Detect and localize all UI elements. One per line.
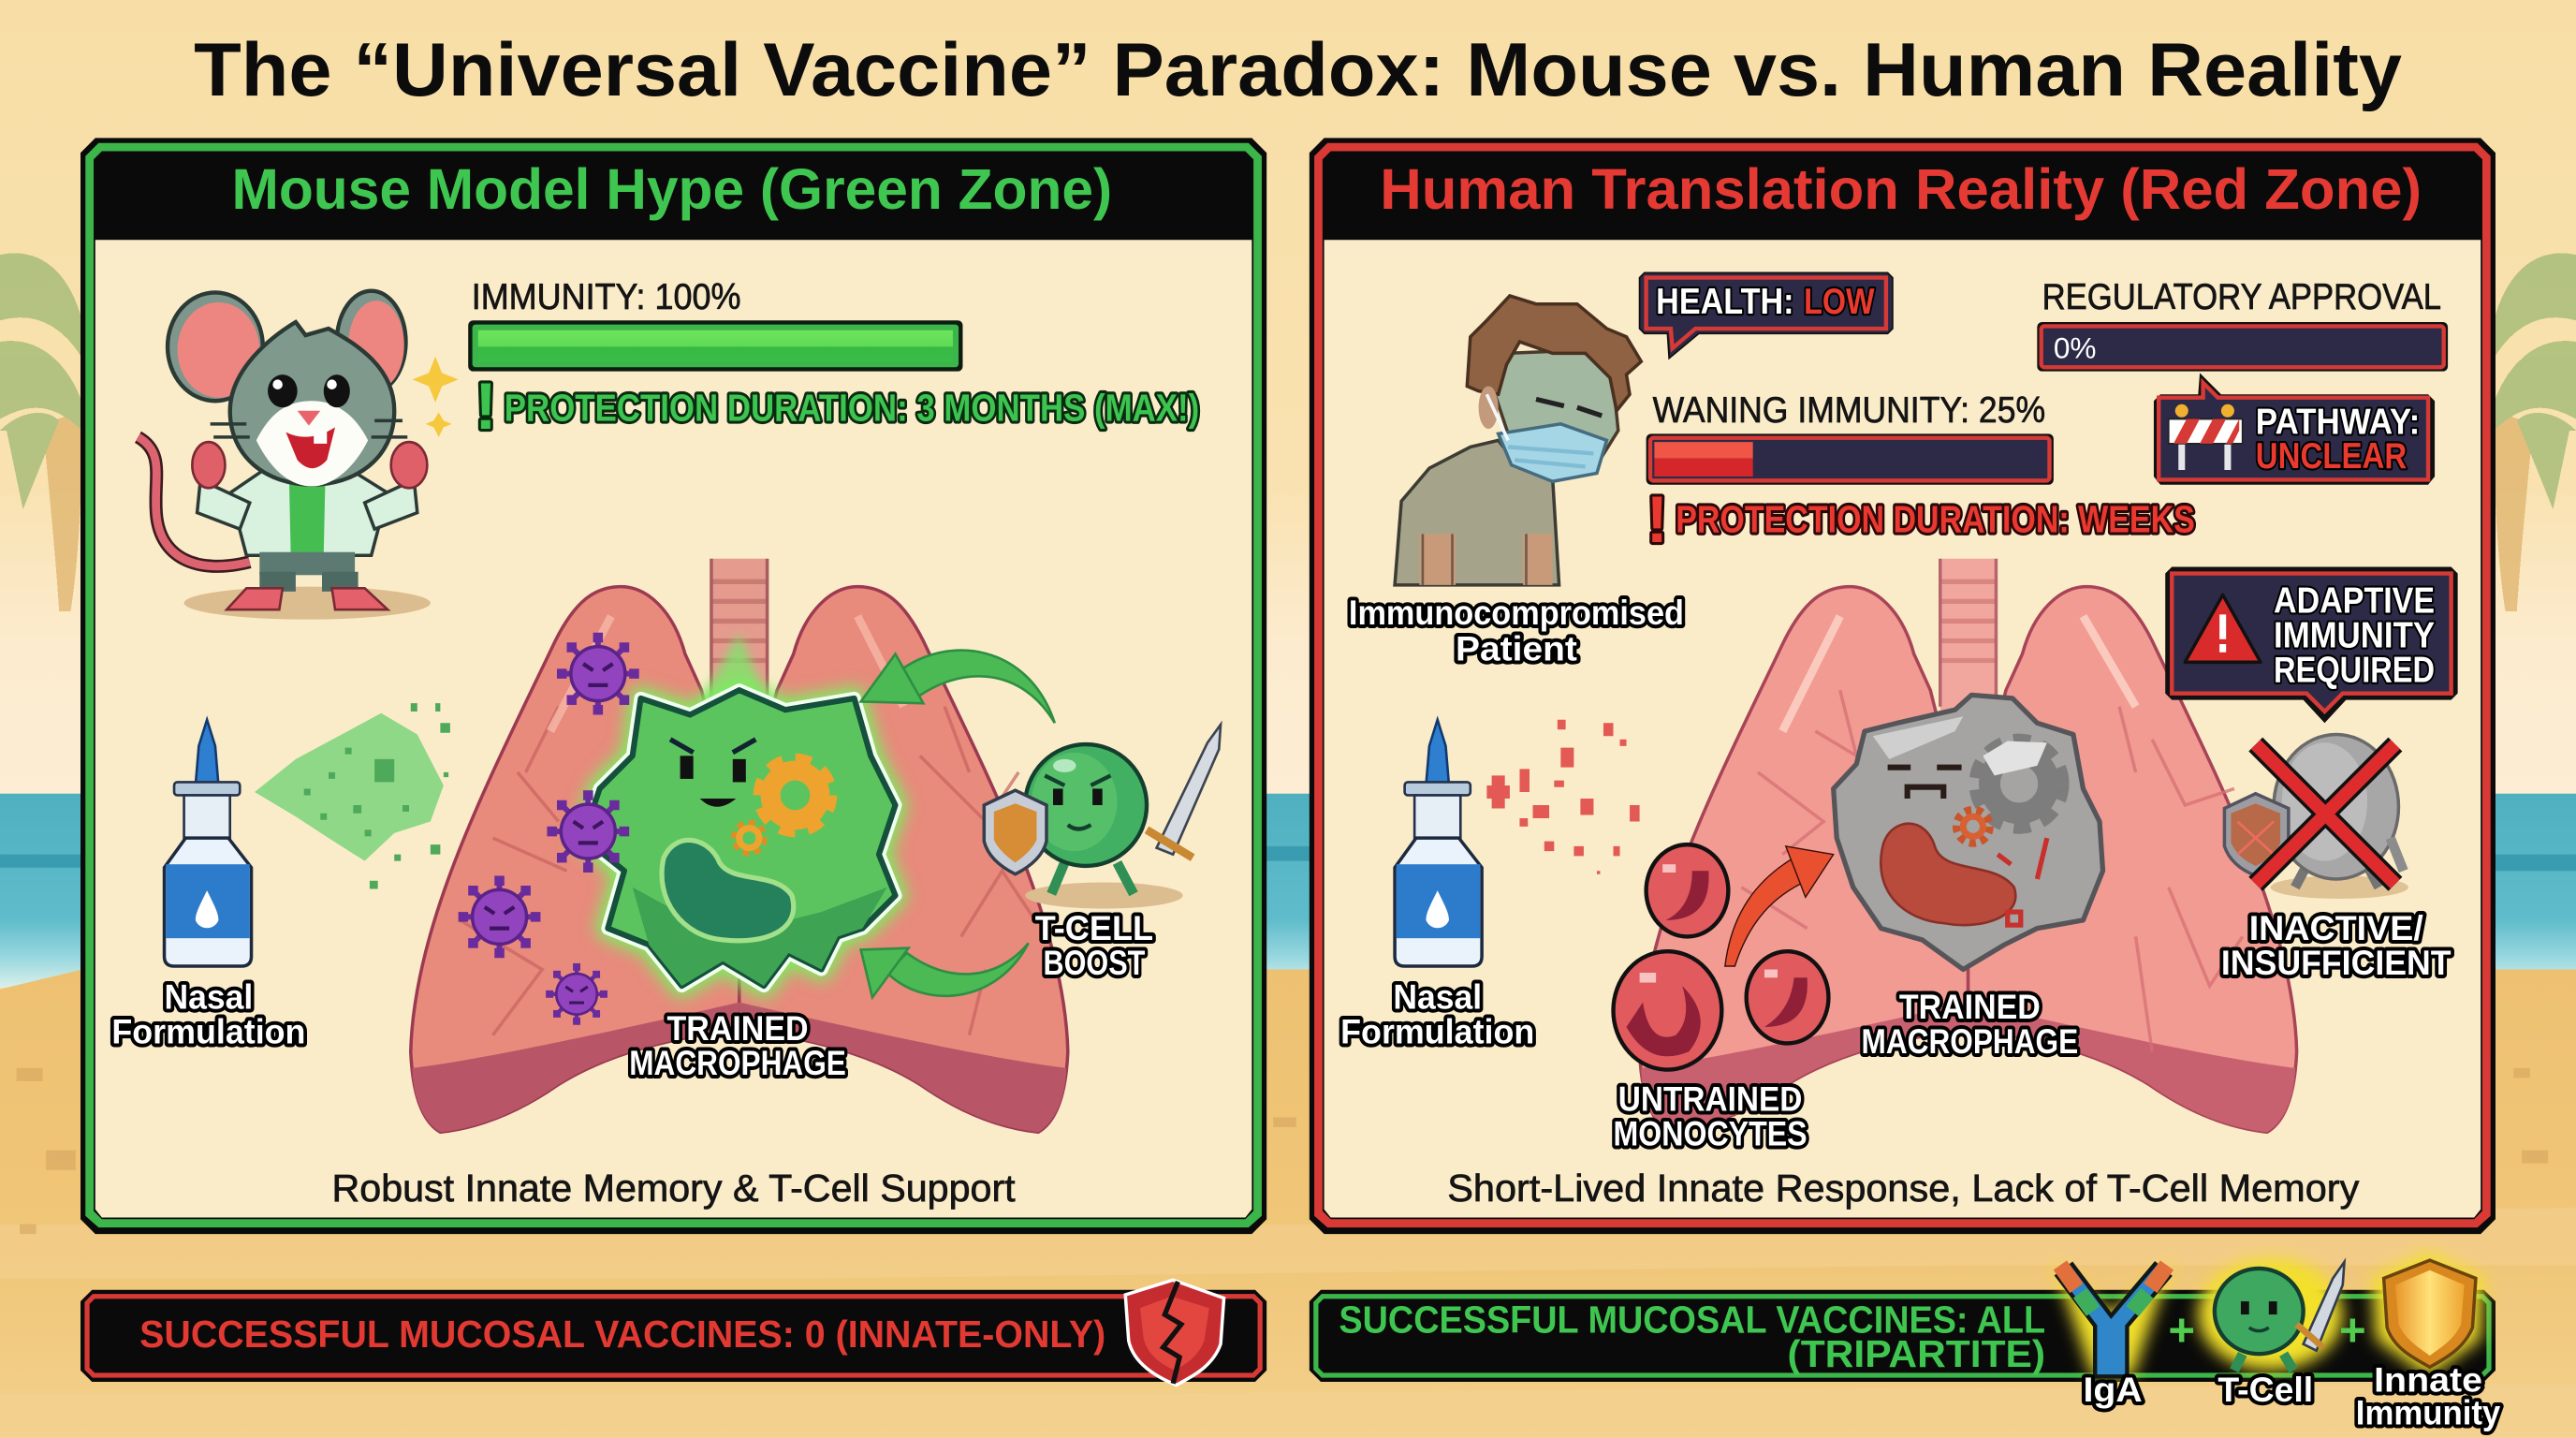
label: T-cell boost: T-CELL bbox=[1035, 909, 1153, 947]
bottom banner: innate-only failure: SUCCESSFUL MUCOSAL VACCINES: 0 (INNATE-ONLY) bbox=[139, 1313, 1105, 1356]
arrow: lower T-cell boost arrow bbox=[861, 943, 1029, 997]
label: inactive / insufficient: INSUFFICIENT bbox=[2221, 944, 2452, 982]
lungs bbox=[411, 587, 1068, 1132]
viruses bbox=[459, 633, 639, 1025]
nucleus bbox=[1881, 824, 2015, 925]
trachea bbox=[711, 559, 768, 740]
label: T-cell boost: BOOST bbox=[1043, 944, 1146, 982]
label: untrained monocytes bbox=[1614, 1079, 1808, 1152]
orange gear small bbox=[735, 823, 764, 853]
icon: nasal spray bottle bbox=[165, 720, 252, 966]
immunity meter bbox=[468, 277, 962, 372]
face bbox=[1888, 768, 1962, 799]
label: trained macrophage bbox=[1862, 988, 2078, 1061]
plus: + bbox=[2339, 1305, 2366, 1356]
untrained monocytes bbox=[1614, 844, 1828, 1070]
speech bubble: health low bbox=[1640, 272, 1893, 359]
panel: human translation reality (red zone) bbox=[1310, 138, 2496, 1234]
small orange gear bbox=[1956, 810, 1989, 843]
icon: innate immunity gold shield bbox=[2384, 1260, 2476, 1367]
regulatory approval meter: 0% bbox=[2054, 331, 2097, 365]
label: trained macrophage: MACROPHAGE bbox=[629, 1044, 846, 1082]
banner text: (TRIPARTITE) bbox=[1788, 1332, 2045, 1375]
callout: pathway unclear: PATHWAY: bbox=[2256, 402, 2420, 442]
icon: warning triangle bbox=[2185, 594, 2261, 662]
label: immunocompromised patient: Immunocompromised bbox=[1349, 594, 1684, 632]
protection duration alert: ! bbox=[475, 369, 497, 443]
icon: nasal spray bottle bbox=[1395, 720, 1482, 966]
icon: T-cell bbox=[2215, 1262, 2345, 1371]
label: immunocompromised patient: Patient bbox=[1456, 630, 1577, 668]
icon halos bbox=[2054, 1252, 2484, 1377]
caption: green zone: Robust Innate Memory & T-Cell Support bbox=[332, 1167, 1016, 1210]
banner text bbox=[1339, 1298, 2045, 1375]
label: immunocompromised patient bbox=[1349, 594, 1684, 668]
label: inactive / insufficient: INACTIVE/ bbox=[2249, 909, 2423, 947]
icon: IgA antibody bbox=[2060, 1265, 2167, 1367]
palm tree: left bbox=[0, 253, 82, 611]
inactive T-cell crossed out bbox=[2224, 735, 2408, 899]
face bbox=[670, 740, 755, 807]
caption: red zone: Short-Lived Innate Response, Lack of T-Cell Memory bbox=[1447, 1167, 2360, 1210]
callout: pathway unclear bbox=[2154, 373, 2435, 485]
label: nasal formulation bbox=[1340, 978, 1534, 1050]
label: nasal formulation: Nasal bbox=[165, 978, 253, 1017]
label: T-Cell: T-Cell bbox=[2217, 1371, 2313, 1409]
icon: broken shield bbox=[1125, 1280, 1224, 1386]
regulatory approval meter: REGULATORY APPROVAL bbox=[2042, 277, 2441, 317]
damaged gray macrophage bbox=[1834, 695, 2103, 970]
trachea bbox=[1940, 559, 1996, 723]
protection duration alert bbox=[1647, 482, 2195, 556]
protection duration alert: PROTECTION DURATION: WEEKS bbox=[1676, 498, 2195, 541]
label: trained macrophage: TRAINED bbox=[667, 1009, 809, 1048]
orange gear large bbox=[761, 761, 829, 829]
label: nasal formulation: Formulation bbox=[111, 1012, 305, 1050]
waning immunity meter bbox=[1647, 390, 2054, 485]
callout: adaptive immunity required: ADAPTIVE bbox=[2274, 581, 2435, 622]
immunity meter: IMMUNITY: 100% bbox=[472, 277, 741, 317]
mouse scientist character bbox=[138, 291, 431, 620]
arrow: monocytes to macrophage bbox=[1725, 846, 1834, 966]
label: innate immunity: Innate bbox=[2374, 1361, 2482, 1400]
label: trained macrophage: TRAINED bbox=[1899, 988, 2041, 1026]
label: trained macrophage bbox=[629, 1009, 846, 1082]
regulatory approval meter bbox=[2037, 277, 2448, 372]
speech bubble: health low: HEALTH: bbox=[1656, 282, 1794, 322]
label: IgA: IgA bbox=[2083, 1371, 2143, 1409]
palm tree: right bbox=[2494, 253, 2576, 611]
panel: mouse model hype (green zone) bbox=[80, 138, 1266, 1234]
waning immunity meter: WANING IMMUNITY: 25% bbox=[1653, 390, 2045, 431]
icon: road barrier bbox=[2169, 404, 2243, 470]
label: nasal formulation bbox=[111, 978, 305, 1050]
nucleus bbox=[662, 840, 794, 941]
protection duration alert: ! bbox=[1647, 482, 1668, 556]
label: trained macrophage: MACROPHAGE bbox=[1862, 1022, 2078, 1061]
gray broken gear bbox=[1976, 741, 2062, 827]
label: innate immunity bbox=[2356, 1361, 2501, 1432]
callout: adaptive immunity required: IMMUNITY bbox=[2274, 616, 2435, 656]
trained macrophage: glowing green cell bbox=[583, 633, 896, 986]
bottom banner: tripartite success bbox=[1310, 1252, 2501, 1432]
protection duration alert: PROTECTION DURATION: 3 MONTHS (MAX!) bbox=[505, 386, 1199, 429]
green nasal spray cloud bbox=[255, 703, 450, 889]
protection duration alert bbox=[475, 369, 1199, 443]
red nasal spray droplets bbox=[1486, 720, 1640, 874]
icon: sparkles bbox=[413, 357, 459, 437]
patient character bbox=[1395, 296, 1641, 585]
heading: red zone: Human Translation Reality (Red Zone) bbox=[1380, 157, 2422, 222]
label: nasal formulation: Nasal bbox=[1393, 978, 1482, 1017]
label: T-cell boost bbox=[1035, 909, 1153, 982]
label: nasal formulation: Formulation bbox=[1340, 1012, 1534, 1050]
label: inactive / insufficient bbox=[2221, 909, 2452, 982]
callout: pathway unclear: UNCLEAR bbox=[2256, 436, 2407, 477]
label: innate immunity: Immunity bbox=[2356, 1394, 2501, 1432]
callout: adaptive immunity required bbox=[2165, 567, 2458, 723]
plus: + bbox=[2168, 1305, 2195, 1356]
bottom banner: innate-only failure bbox=[80, 1280, 1266, 1386]
T-cell with sword and shield bbox=[984, 725, 1221, 909]
label: untrained monocytes: UNTRAINED bbox=[1618, 1079, 1802, 1118]
lungs bbox=[1640, 587, 2297, 1132]
callout: adaptive immunity required: REQUIRED bbox=[2274, 650, 2435, 690]
banner text: SUCCESSFUL MUCOSAL VACCINES: ALL bbox=[1339, 1298, 2045, 1341]
label: untrained monocytes: MONOCYTES bbox=[1614, 1114, 1808, 1152]
title: The “Universal Vaccine” Paradox: Mouse vs. Human Reality bbox=[194, 28, 2402, 112]
arrow: upper T-cell boost arrow bbox=[861, 651, 1055, 723]
heading: green zone: Mouse Model Hype (Green Zone) bbox=[231, 157, 1112, 222]
speech bubble: health low: LOW bbox=[1804, 282, 1875, 322]
